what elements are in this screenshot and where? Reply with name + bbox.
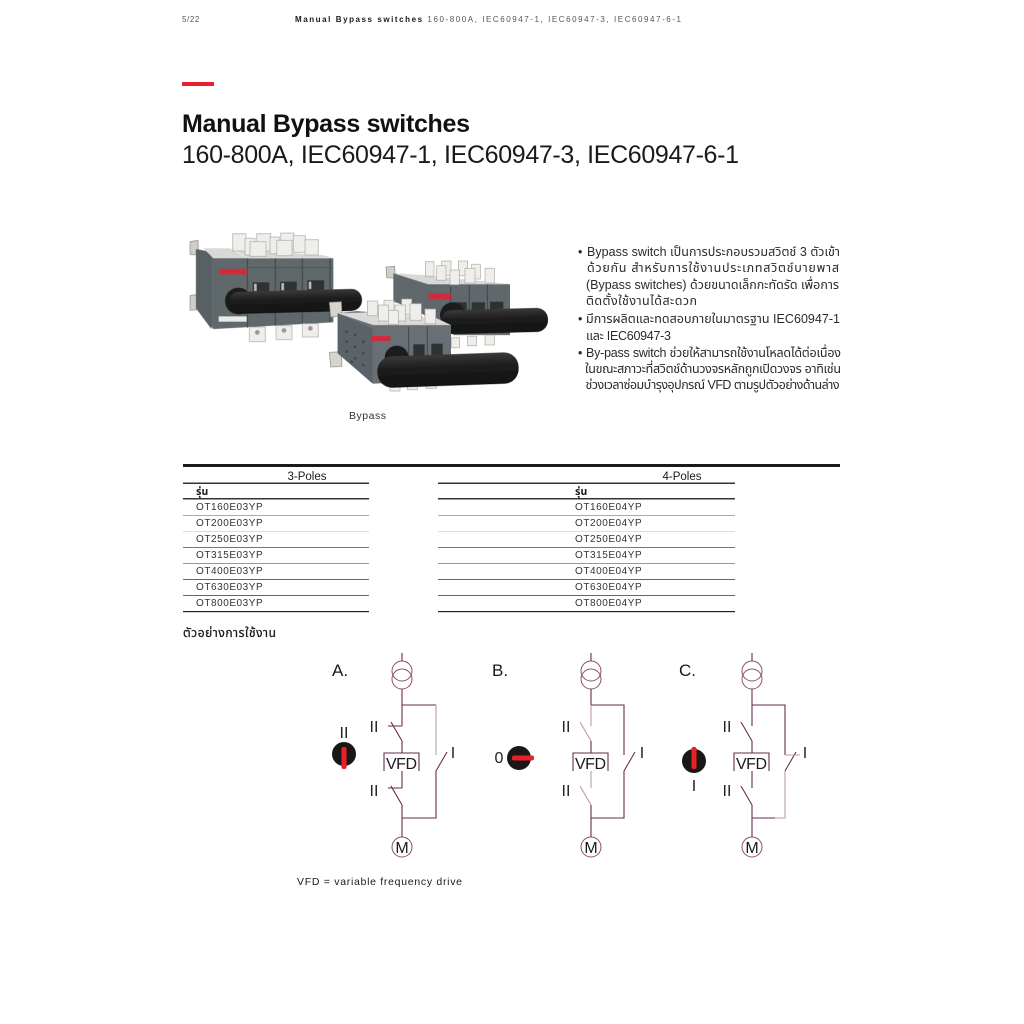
table: 4-Poles: OT800E04YP xyxy=(575,598,642,609)
diagram C: I xyxy=(803,745,807,762)
selector knob: position 0 xyxy=(495,746,534,770)
feature bullet list: Bypass switch เป็นการประกอบรวมสวิตช์ 3 ตัวเข้า xyxy=(587,245,840,259)
table: 3-Poles xyxy=(183,471,369,612)
table: 4-Poles: OT250E04YP xyxy=(575,534,642,545)
usage example heading: ตัวอย่างการใช้งาน xyxy=(183,626,276,640)
diagram B xyxy=(492,653,644,857)
table: 4-Poles: OT200E04YP xyxy=(575,518,642,529)
table: 3-Poles: OT250E03YP xyxy=(196,534,263,545)
feature bullet list: • xyxy=(578,245,582,259)
diagram C: VFD xyxy=(736,756,767,773)
feature bullet list: และ IEC60947-3 xyxy=(586,329,671,343)
table: 3-Poles: 3-Poles xyxy=(288,471,327,483)
feature bullet list: ติดตั้งใช้งานได้สะดวก xyxy=(586,293,697,308)
selector knob: position II: II xyxy=(340,725,348,742)
selector knob: position II xyxy=(332,725,356,769)
table: 4-Poles xyxy=(438,471,735,612)
diagram A xyxy=(332,653,455,857)
diagram C: II xyxy=(723,719,731,736)
diagram C: C. xyxy=(679,661,696,680)
feature bullet list xyxy=(578,245,841,392)
diagram A: VFD xyxy=(386,756,417,773)
selector knob: position I: I xyxy=(692,778,696,795)
feature bullet list: มีการผลิตและทดสอบภายในมาตรฐาน IEC60947-1 xyxy=(586,312,840,326)
diagram B: I xyxy=(640,745,644,762)
VFD footnote: VFD = variable frequency drive xyxy=(297,876,462,888)
table: 4-Poles: OT315E04YP xyxy=(575,550,642,561)
selector knob: position 0: 0 xyxy=(495,750,504,767)
diagram C: M xyxy=(745,840,759,857)
diagram B: B. xyxy=(492,661,508,680)
photo caption: Bypass xyxy=(349,410,386,422)
diagram A: II xyxy=(370,719,378,736)
table: 4-Poles: รุ่น xyxy=(575,485,587,498)
table: 4-Poles: 4-Poles xyxy=(662,471,702,483)
page header: Manual Bypass switches 160-800A, IEC60947-1, IEC60947-3, IEC60947-6-1 xyxy=(295,15,682,24)
diagram C xyxy=(679,653,807,857)
page header: 5/22 xyxy=(182,15,200,24)
table: 3-Poles: รุ่น xyxy=(196,485,208,498)
switch unit: front xyxy=(329,299,519,391)
title xyxy=(182,110,739,169)
red accent bar xyxy=(182,82,214,86)
diagram C: II xyxy=(723,783,731,800)
feature bullet list: • xyxy=(578,312,582,326)
diagram B: II xyxy=(562,783,570,800)
table: 3-Poles: OT630E03YP xyxy=(196,582,263,593)
feature bullet list: ในขณะสภาวะที่สวิตช์ด้านวงจรหลักถูกเปิดวงจร อาทิเช่น xyxy=(585,360,841,376)
feature bullet list: • xyxy=(578,346,582,360)
diagram A: A. xyxy=(332,661,348,680)
diagram A: M xyxy=(395,840,409,857)
table: 3-Poles: OT160E03YP xyxy=(196,502,263,513)
feature bullet list: ช่วงเวลาซ่อมบำรุงอุปกรณ์ VFD ตามรูปตัวอย่างด้านล่าง xyxy=(586,378,840,392)
switch unit: rear right xyxy=(386,261,548,348)
selector knob: position I xyxy=(682,747,706,795)
diagram A: II xyxy=(370,783,378,800)
feature bullet list: By-pass switch ช่วยให้สามารถใช้งานโหลดได้ต่อเนื่อง xyxy=(586,344,841,360)
feature bullet list: ด้วยกัน สำหรับการใช้งานประเภทสวิตช์บายพาส xyxy=(587,261,839,275)
table: 4-Poles: OT630E04YP xyxy=(575,582,642,593)
feature bullet list: (Bypass switches) ด้วยขนาดเล็กกะทัดรัด เพื่อการ xyxy=(586,276,839,292)
table: 4-Poles: OT400E04YP xyxy=(575,566,642,577)
diagram B: M xyxy=(584,840,598,857)
table: 4-Poles: OT160E04YP xyxy=(575,502,642,513)
product photo: three bypass switches xyxy=(190,233,548,391)
section rule xyxy=(183,464,840,467)
table: 3-Poles: OT315E03YP xyxy=(196,550,263,561)
table: 3-Poles: OT200E03YP xyxy=(196,518,263,529)
table: 3-Poles: OT400E03YP xyxy=(196,566,263,577)
switch unit: rear left xyxy=(190,233,362,342)
table: 3-Poles: OT800E03YP xyxy=(196,598,263,609)
diagram B: VFD xyxy=(575,756,606,773)
diagram B: II xyxy=(562,719,570,736)
title: 160-800A, IEC60947-1, IEC60947-3, IEC60947-6-1 xyxy=(182,141,739,169)
diagram A: I xyxy=(451,745,455,762)
title: Manual Bypass switches xyxy=(182,110,470,138)
